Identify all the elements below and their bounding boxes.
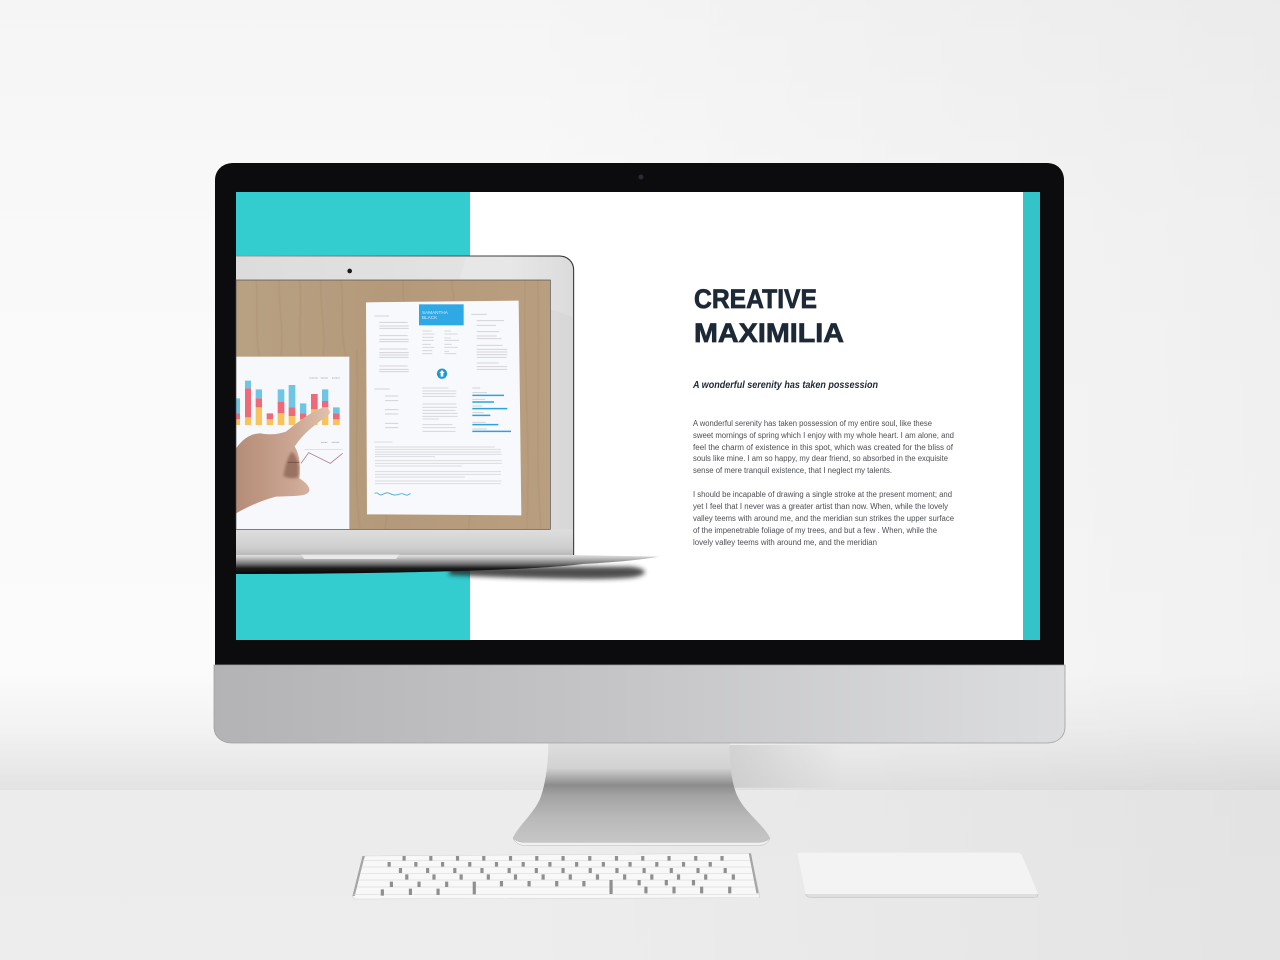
skill bars <box>472 395 511 431</box>
key row dividers <box>354 861 759 895</box>
resume left column lines <box>374 316 409 428</box>
laptop shadow <box>449 567 645 579</box>
first paragraph: sense of mere tranquil existence, that I neglect my talents. <box>693 466 892 475</box>
thumb crease <box>288 462 300 463</box>
laptop hinge notch <box>301 555 399 559</box>
teal right strip <box>1023 192 1040 640</box>
cover letter text <box>374 442 502 484</box>
second paragraph: yet I feel that I never was a greater artist than now. When, while the lovely <box>693 502 948 511</box>
first paragraph <box>693 419 954 475</box>
chart legend <box>309 378 340 442</box>
screen border <box>236 280 550 529</box>
second paragraph <box>693 490 955 547</box>
webcam <box>638 174 644 180</box>
title line one: CREATIVE <box>694 284 817 314</box>
lid glare <box>459 257 573 317</box>
resume middle column lines <box>422 331 459 431</box>
resume name: SAMANTHA <box>422 310 449 315</box>
trackpad surface <box>797 853 1038 896</box>
title <box>694 284 844 348</box>
resume surname: BLACK <box>422 315 438 320</box>
stand shadow on wall <box>729 745 843 788</box>
laptop lid <box>236 256 574 555</box>
first paragraph: sweet mornings of spring which I enjoy with my whole heart. I am alone, and <box>693 431 954 440</box>
teal left panel <box>236 192 470 640</box>
title line two: MAXIMILIA <box>694 318 844 348</box>
pointing hand <box>236 407 330 513</box>
stand neck and foot <box>513 743 769 843</box>
screen white <box>236 192 1040 640</box>
wood background <box>236 280 550 529</box>
resume paper <box>366 301 521 515</box>
laptop screen photo <box>236 280 550 529</box>
resume sheet <box>366 301 521 515</box>
first paragraph: souls like mine. I am so happy, my dear friend, so absorbed in the exquisite <box>693 454 949 463</box>
wood grain <box>256 280 541 529</box>
slide text block <box>692 284 955 547</box>
second paragraph: of the impenetrable foliage of my trees, and but a few . When, while the <box>693 526 938 535</box>
laptop base <box>236 555 659 574</box>
first paragraph: feel the charm of existence in this spot, which was created for the bliss of <box>693 443 954 452</box>
first paragraph: A wonderful serenity has taken possession of my entire soul, like these <box>693 419 933 428</box>
laptop camera <box>347 269 352 273</box>
resume header <box>419 304 464 325</box>
monitor <box>214 163 1065 743</box>
second paragraph: valley teems with around me, and the meridian sun strikes the upper surface <box>693 514 955 523</box>
keyboard <box>353 853 759 899</box>
monitor chin <box>214 665 1065 743</box>
profile badge icon <box>437 368 447 379</box>
stacked bar chart <box>236 381 340 425</box>
subtitle: A wonderful serenity has taken possession <box>692 380 878 391</box>
lower lid strip <box>236 529 573 555</box>
badge glyph <box>439 370 445 377</box>
desk surface <box>0 790 1280 960</box>
keyboard left and right edges <box>354 853 758 896</box>
resume right column lines <box>471 314 507 429</box>
stand foot edge <box>513 837 770 846</box>
laptop mockup <box>236 256 659 579</box>
keyboard body <box>353 853 759 899</box>
trackpad edge <box>806 894 1038 898</box>
chart paper <box>236 357 349 529</box>
monitor bezel <box>215 163 1064 665</box>
second paragraph: lovely valley teems with around me, and the meridian <box>693 538 877 547</box>
paper sheet <box>236 357 349 529</box>
lid outline <box>236 256 574 555</box>
key gaps <box>381 856 735 896</box>
monitor stand <box>513 743 843 846</box>
trackpad <box>797 853 1038 898</box>
second paragraph: I should be incapable of drawing a single stroke at the present moment; and <box>693 490 952 499</box>
line chart <box>301 449 343 463</box>
hand shading <box>283 452 299 478</box>
signature <box>375 493 411 495</box>
